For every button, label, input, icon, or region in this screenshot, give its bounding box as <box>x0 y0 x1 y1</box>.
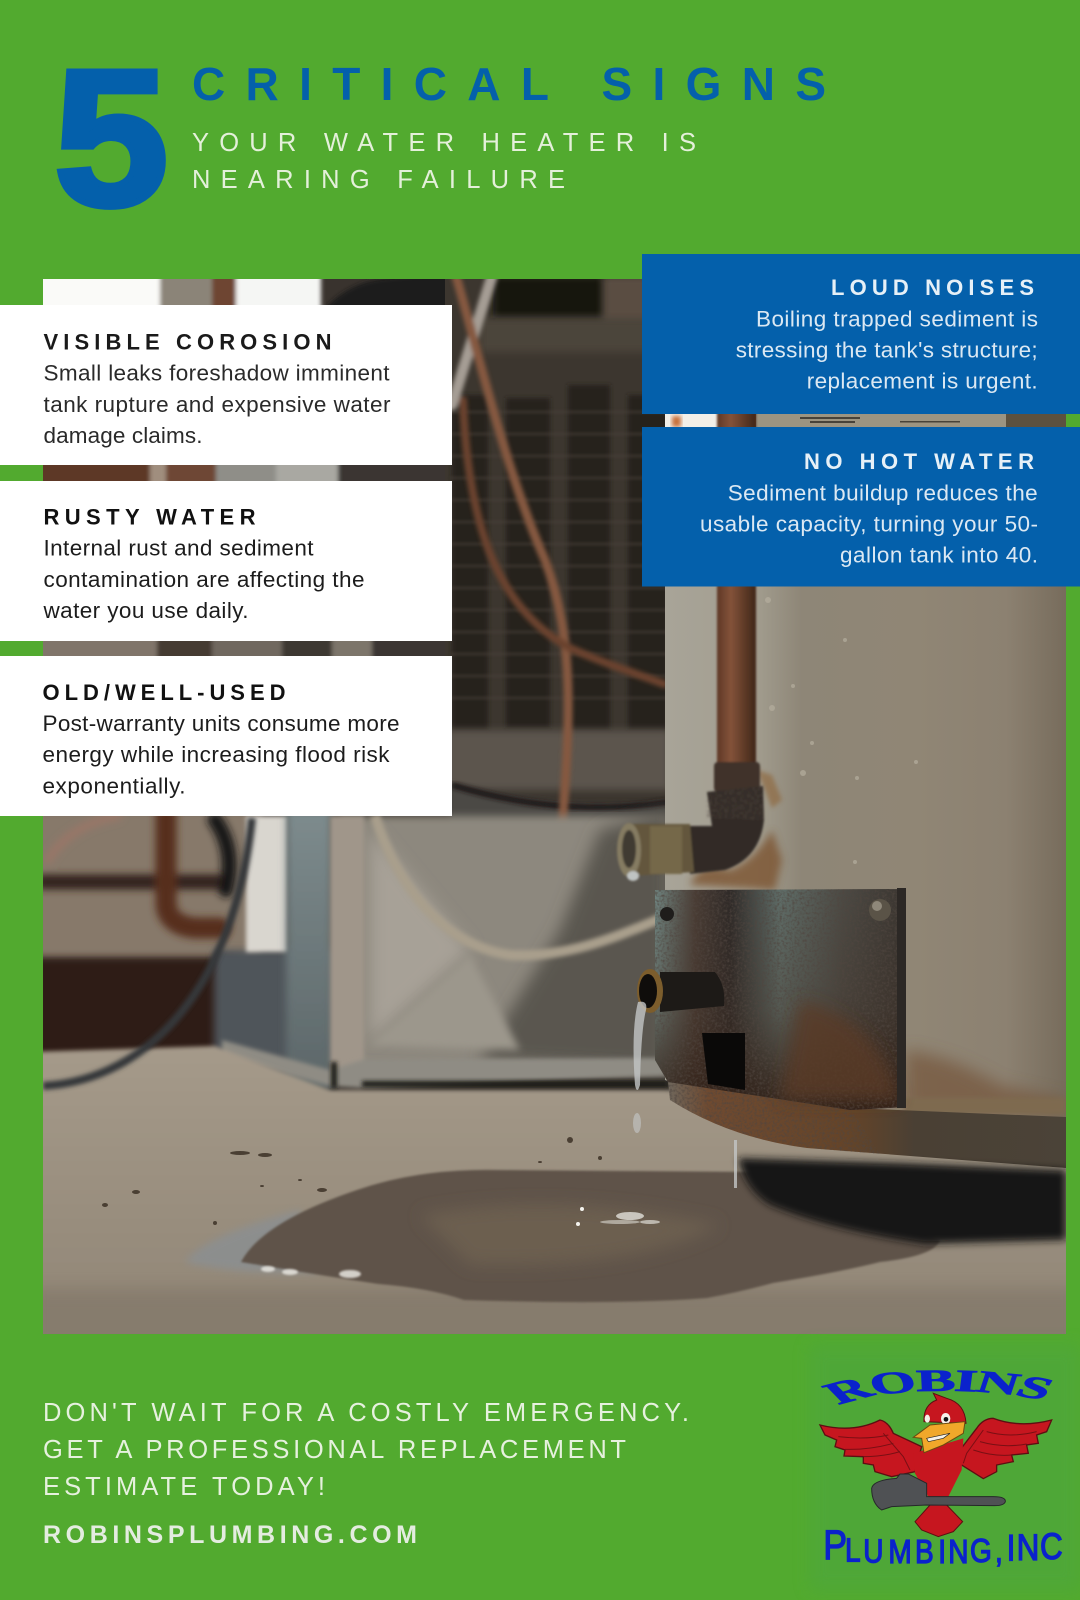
panel: no hot water: usable capacity, turning your 50- <box>700 512 1038 536</box>
subtitle: YOUR WATER HEATER IS <box>192 129 696 157</box>
subtitle: NEARING FAILURE <box>192 166 565 194</box>
panel: old or well-used: energy while increasing flood risk <box>42 742 390 767</box>
panel: no hot water: Sediment buildup reduces the <box>728 480 1038 506</box>
black hose <box>43 818 252 1086</box>
logo: PLUMBING, INC wordmark: P <box>823 1522 847 1569</box>
heading number 5: 5 <box>54 30 168 247</box>
panel: visible corrosion: damage claims. <box>44 423 202 448</box>
metal box in background <box>214 810 670 1090</box>
panel: no hot water: gallon tank into 40. <box>840 542 1038 568</box>
tank <box>665 400 1066 1125</box>
panel: loud noises: replacement is urgent. <box>807 368 1038 394</box>
panel: old or well-used: OLD/WELL-USED <box>42 680 286 705</box>
shadow under tank <box>738 1158 1066 1244</box>
panel: visible corrosion: VISIBLE COROSION <box>44 329 332 354</box>
panel: no hot water <box>642 427 1080 586</box>
panel: visible corrosion: tank rupture and expensive water <box>44 392 391 417</box>
call to action: ESTIMATE TODAY! <box>43 1473 325 1501</box>
panel: visible corrosion <box>0 305 452 465</box>
pan under tank <box>668 1082 1066 1168</box>
panel: old or well-used: exponentially. <box>42 773 186 798</box>
logo: Robins Plumbing <box>818 1358 1067 1577</box>
panel: no hot water: NO HOT WATER <box>804 449 1034 474</box>
copper and white wires <box>452 276 664 830</box>
call to action: GET A PROFESSIONAL REPLACEMENT <box>43 1436 626 1464</box>
panel: rusty water: RUSTY WATER <box>44 504 256 530</box>
website: ROBINSPLUMBING.COM <box>43 1521 417 1549</box>
photo: leaking water heater <box>30 270 1080 1360</box>
title: CRITICAL SIGNS <box>192 58 826 110</box>
puddle <box>185 1170 940 1302</box>
logo: PLUMBING, INC wordmark: INC <box>1007 1527 1063 1569</box>
background left: wall, pipes <box>35 810 260 1058</box>
call to action: DON'T WAIT FOR A COSTLY EMERGENCY. <box>43 1399 689 1427</box>
panel: old or well-used <box>0 656 452 816</box>
panel: rusty water: Internal rust and sediment <box>44 536 314 561</box>
logo: robin mascot with wrench <box>820 1393 1052 1537</box>
logo background <box>810 1345 1080 1590</box>
concrete floor <box>30 1046 1080 1360</box>
panel: rusty water: water you use daily. <box>42 598 248 623</box>
panel: loud noises: Boiling trapped sediment is <box>756 306 1038 332</box>
corroded plate <box>655 888 906 1110</box>
call to action <box>43 1399 689 1501</box>
panel: loud noises: stressing the tank's structure; <box>736 338 1038 362</box>
logo: ROBINS wordmark: ROBINS <box>820 1370 1052 1405</box>
panel: visible corrosion: Small leaks foreshadow imminent <box>44 361 390 386</box>
logo: PLUMBING, INC wordmark <box>823 1522 1063 1571</box>
logo: PLUMBING, INC wordmark: LUMBING, <box>845 1532 1003 1571</box>
drain spout <box>637 969 724 1013</box>
copper pipe and elbow valve <box>617 400 764 881</box>
subtitle <box>192 129 696 194</box>
panel: old or well-used: Post-warranty units consume more <box>42 711 400 736</box>
background top-left strip <box>43 279 445 656</box>
panel: loud noises: LOUD NOISES <box>831 275 1034 300</box>
panel: rusty water: contamination are affecting the <box>44 567 364 592</box>
water drips <box>633 1002 737 1188</box>
panel: rusty water <box>0 481 452 641</box>
panel: loud noises <box>642 254 1080 414</box>
background grille unit <box>445 276 670 840</box>
